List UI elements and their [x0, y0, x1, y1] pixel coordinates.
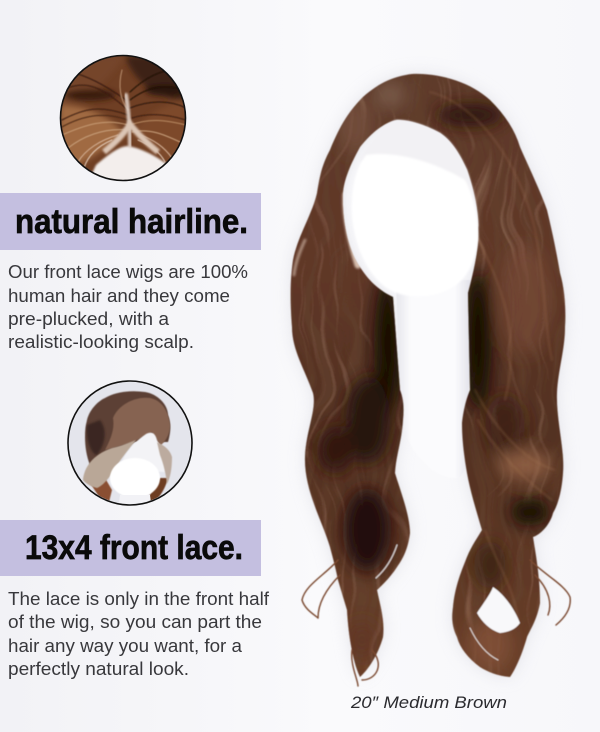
hair: [285, 70, 575, 690]
circle border: [60, 56, 186, 180]
body text: front lace: of the wig, so you can part the: [8, 612, 262, 632]
gap inside lower right curl: [477, 587, 520, 633]
lace flap: [83, 440, 136, 488]
lavender bar: [0, 520, 261, 576]
soft shadow behind wig: [291, 74, 565, 677]
body text: natural hairline: realistic-looking scalp.: [8, 332, 194, 352]
heading text: 13x4 front lace.: [25, 529, 243, 567]
mannequin neck: [396, 280, 470, 478]
lace forehead: [88, 146, 170, 182]
part line: [126, 95, 130, 146]
white gaps between strands: [376, 545, 498, 660]
heading text: natural hairline.: [15, 203, 248, 241]
body text: natural hairline: human hair and they come: [8, 286, 230, 306]
hair shading: [317, 81, 551, 671]
body text: front lace: [8, 589, 270, 679]
dark hair cap: [85, 391, 170, 465]
scalp hair base: [60, 55, 186, 181]
face: [352, 154, 478, 296]
fine hair texture: [308, 113, 566, 560]
hair strips below: [91, 480, 113, 500]
body text: front lace: perfectly natural look.: [8, 659, 189, 679]
body text: natural hairline: pre-plucked, with a: [8, 309, 170, 329]
circle photo: front lace: [68, 380, 192, 510]
circle photo: natural hairline: [60, 55, 186, 182]
body text: front lace: hair any way you want, for a: [8, 636, 243, 656]
caption: wig length and colour: 20″ Medium Brown: [350, 693, 507, 712]
pale lace edge strands: [346, 195, 358, 265]
mannequin head with lace: [352, 120, 478, 296]
photo background: [68, 380, 192, 506]
body text: natural hairline: [8, 262, 248, 352]
body text: natural hairline: Our front lace wigs are 100%: [8, 262, 248, 282]
circle border: [68, 381, 192, 505]
hair strands: [60, 70, 186, 168]
heading bar: 13x4 front lace: [0, 520, 261, 576]
body text: front lace: The lace is only in the front half: [8, 589, 270, 609]
heading bar: natural hairline: [0, 193, 261, 250]
lavender bar: [0, 193, 261, 250]
lace panel: [105, 398, 170, 450]
right lace strip: [157, 442, 172, 484]
mannequin forehead lace: [120, 433, 165, 472]
hair sections: [60, 56, 186, 165]
loose wisps: [302, 560, 570, 686]
mannequin face: [110, 458, 160, 498]
forehead lace: [360, 120, 478, 227]
hair strands: [294, 92, 555, 620]
wig on mannequin: [285, 70, 575, 690]
